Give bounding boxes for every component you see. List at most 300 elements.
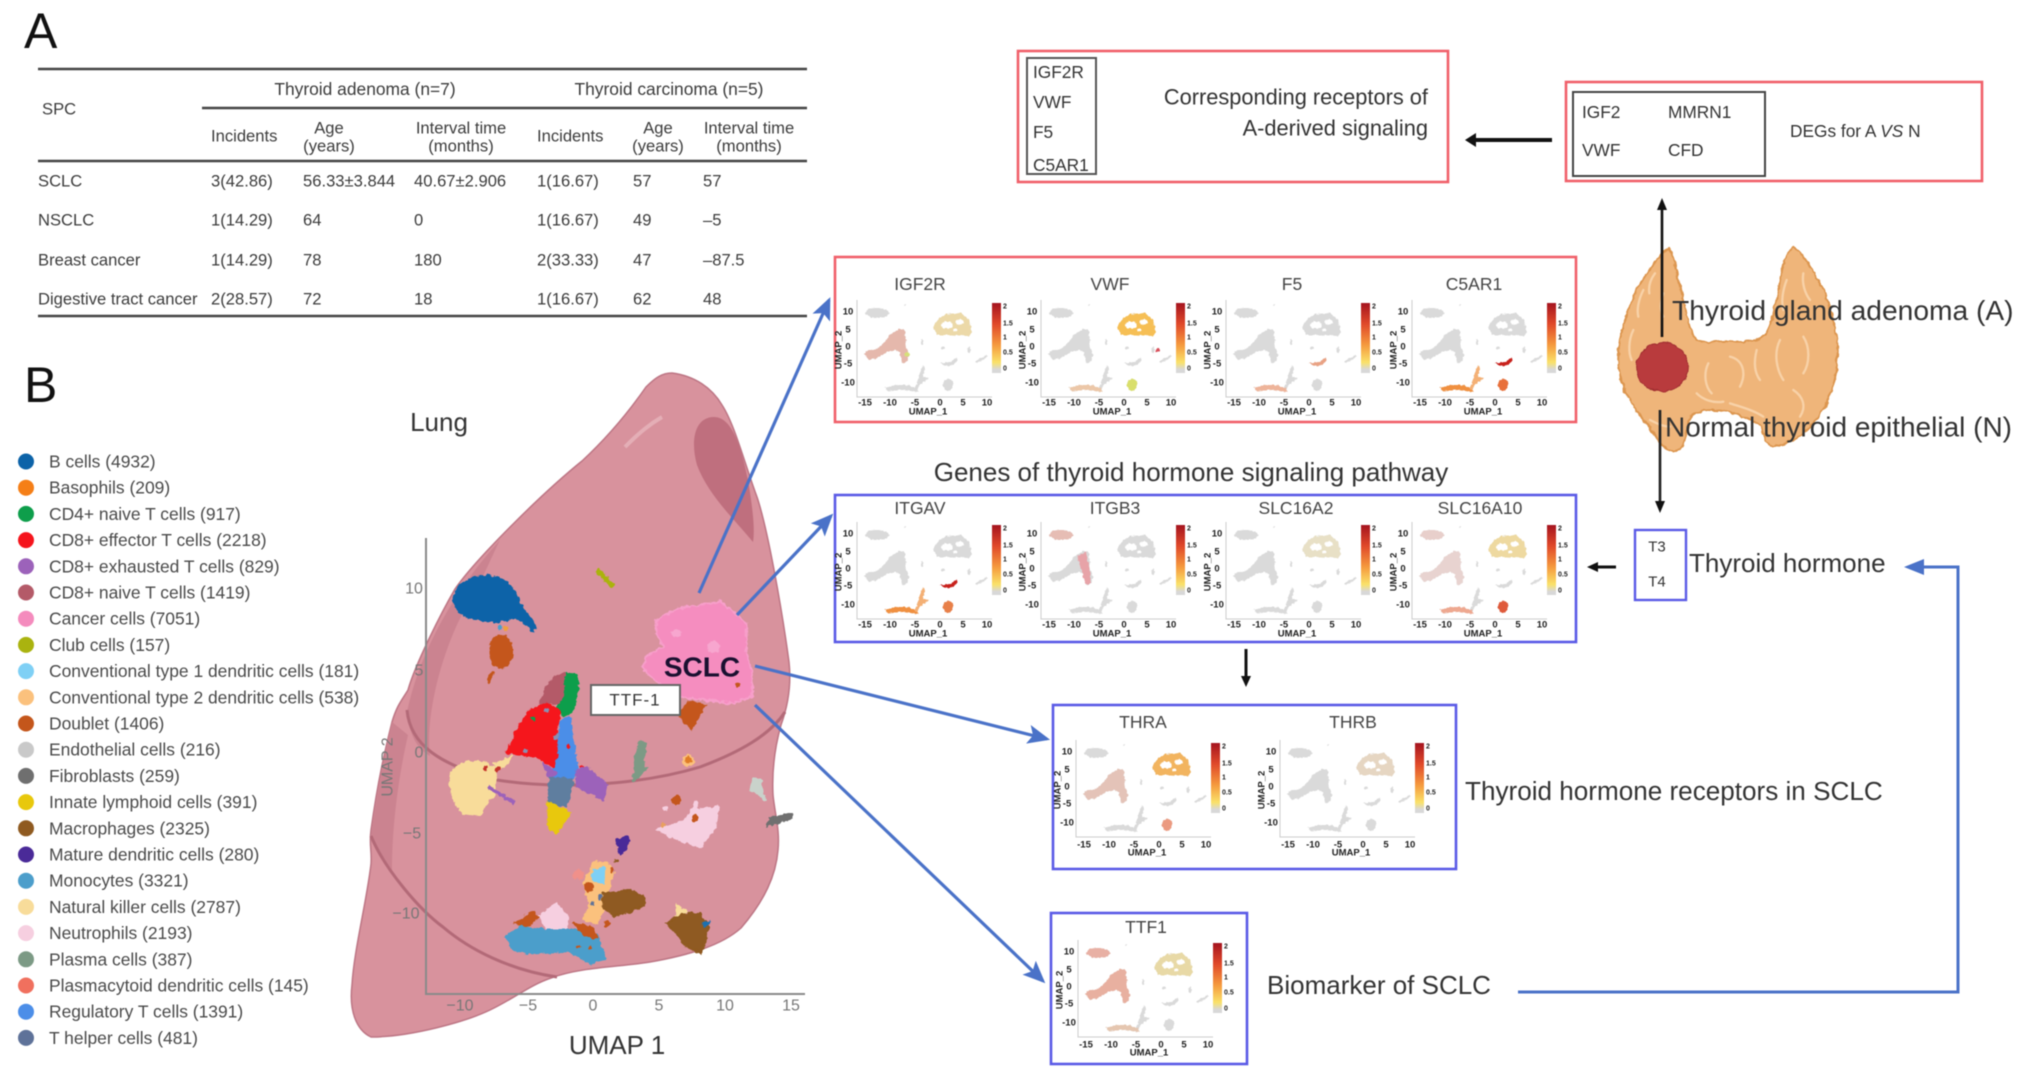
plot THRB: 0: [1426, 806, 1430, 812]
panel: corresponding receptors: [1018, 51, 1448, 182]
legend item Neutrophils: Neutrophils (2193): [49, 923, 192, 943]
plot SLC16A10: 0: [1558, 588, 1562, 594]
plot ITGAV: 1.5: [1003, 542, 1013, 550]
plot SLC16A2: 10: [1212, 528, 1222, 540]
plot F5: 5: [1214, 324, 1220, 336]
plot THRA: 10: [1201, 840, 1211, 850]
plot THRA: -10: [1060, 818, 1074, 828]
plot THRA: 0: [1156, 840, 1162, 850]
plot SLC16A10: 1: [1558, 556, 1562, 564]
UMAP axes: 15: [782, 998, 800, 1014]
plot F5: -10: [1210, 378, 1224, 388]
plot TTF1: 0: [1158, 1040, 1164, 1050]
panel: thyroid hormone pathway UMAPs: [834, 495, 1576, 642]
plot THRB: -5: [1334, 840, 1343, 850]
blue arrow to blue UMAP panel: [737, 516, 831, 615]
plot TTF1: -5: [1132, 1040, 1141, 1050]
plot IGF2R: UMAP_1: [909, 406, 948, 418]
legend item cDC2: Conventional type 2 dendritic cells (538): [49, 687, 359, 707]
row NSCLC: [38, 210, 721, 230]
plot THRA: 0: [1064, 782, 1070, 792]
plot SLC16A10: -10: [1438, 620, 1452, 630]
plot SLC16A2: -15: [1227, 620, 1242, 630]
plot ITGB3: UMAP_2: [1018, 553, 1028, 591]
plot THRB: UMAP_2: [1256, 771, 1268, 809]
legend item CD4 naive: CD4+ naive T cells (917): [49, 504, 241, 524]
plot F5: 0: [1372, 366, 1376, 372]
plot SLC16A2: -5: [1213, 580, 1222, 592]
plot SLC16A10: 5: [1400, 546, 1406, 558]
plot THRB: 10: [1266, 746, 1276, 758]
thyroid labels: [1665, 294, 2014, 442]
plot TTF1: -10: [1062, 1018, 1076, 1028]
plot THRA: 0.5: [1222, 790, 1232, 796]
plot IGF2R: -10: [883, 398, 897, 408]
caption: thyroid hormone: Thyroid hormone: [1689, 548, 1886, 578]
UMAP axes: 5: [655, 998, 664, 1014]
plot VWF: 1: [1187, 334, 1191, 342]
legend item CD8 naive: CD8+ naive T cells (1419): [49, 582, 250, 602]
plot C5AR1: 0: [1400, 342, 1406, 352]
plot C5AR1: [1388, 300, 1568, 418]
plot ITGB3: 1: [1187, 556, 1191, 564]
plot F5: -5: [1213, 358, 1222, 370]
gene list box: VWF: [1033, 92, 1071, 112]
DEG gene box: [1573, 92, 1765, 176]
plot VWF: 2: [1187, 304, 1191, 310]
cluster neutrophils lower: [538, 903, 568, 930]
plot VWF: UMAP_2: [1018, 331, 1028, 369]
row NSCLC: 0: [414, 210, 423, 230]
cluster doublet upper: [485, 625, 513, 685]
plot IGF2R: UMAP_2: [834, 331, 844, 369]
plot SLC16A2: 1.5: [1372, 542, 1382, 550]
plot SLC16A2: -10: [1210, 600, 1224, 610]
table header: (months): [428, 136, 494, 156]
plot ITGB3: -10: [1025, 600, 1039, 610]
legend item Monocytes: Monocytes (3321): [49, 871, 189, 891]
row Digestive tract cancer: 18: [414, 290, 432, 308]
cluster monocytes: [507, 927, 606, 963]
cluster macrophages centre: [603, 890, 645, 917]
cluster neutrophils: [657, 795, 718, 847]
icon: thyroid gland with tumour: [1618, 247, 1838, 452]
plot ITGB3: -5: [1028, 580, 1037, 592]
table header: Incidents: [537, 126, 603, 146]
plot ITGB3: 0: [1121, 620, 1127, 630]
plot IGF2R: -10: [841, 378, 855, 388]
plot C5AR1: 2: [1558, 304, 1562, 310]
plot F5: 0: [1306, 398, 1312, 408]
plot THRB: 5: [1383, 840, 1389, 850]
plot THRA: 5: [1179, 840, 1185, 850]
plot THRB: -10: [1306, 840, 1320, 850]
plot F5: UMAP_2: [1202, 331, 1214, 369]
plot IGF2R: 1: [1003, 334, 1007, 342]
panel: A-derived receptors UMAPs: [834, 257, 1576, 422]
plot SLC16A10: -10: [1396, 600, 1410, 610]
plot SLC16A10: 0: [1400, 564, 1406, 574]
blue arrow to red UMAP panel: [699, 300, 829, 593]
plot TTF1: UMAP_1: [1130, 1048, 1169, 1058]
plot ITGB3: 1.5: [1187, 542, 1197, 550]
plot SLC16A10: [1388, 522, 1568, 640]
UMAP axes: [380, 538, 805, 1014]
plot SLC16A10: 0.5: [1558, 572, 1568, 578]
plot THRB: [1256, 740, 1436, 858]
plot ITGB3: -15: [1042, 620, 1057, 630]
panel label A: A: [24, 3, 58, 59]
plot THRB: 2: [1426, 744, 1430, 750]
TTF-1 box: TTF-1: [609, 690, 661, 710]
plot THRB: UMAP_1: [1332, 848, 1371, 858]
plot IGF2R: [834, 300, 1013, 418]
plot ITGAV: 0.5: [1003, 572, 1013, 578]
plot SLC16A10: 10: [1398, 528, 1408, 540]
plot IGF2R: 0: [1003, 366, 1007, 372]
plot ITGAV: 2: [1003, 526, 1007, 532]
black arrow: DEGs to receptors: [1465, 133, 1552, 147]
plot F5: -5: [1280, 398, 1289, 408]
row SCLC: [38, 172, 721, 190]
row Digestive tract cancer: 1(16.67): [537, 290, 599, 308]
plot THRA: [1052, 740, 1232, 858]
title ITGB3: ITGB3: [1090, 498, 1140, 518]
plot C5AR1: 5: [1400, 324, 1406, 336]
box T3 T4: T4: [1648, 574, 1666, 590]
plot ITGAV: UMAP_1: [909, 628, 948, 640]
cluster Treg: [550, 717, 577, 780]
row Breast cancer: 180: [414, 250, 442, 270]
plot TTF1: 5: [1181, 1040, 1187, 1050]
UMAP axes: −10: [392, 906, 420, 922]
receptors caption: [1164, 84, 1429, 140]
plot F5: 1.5: [1372, 320, 1382, 328]
cluster dendritic strand: [572, 859, 618, 923]
plot THRA: 10: [1062, 746, 1072, 758]
plot VWF: 10: [1027, 306, 1037, 318]
plot C5AR1: 1.5: [1558, 320, 1568, 328]
plot F5: 10: [1351, 398, 1361, 408]
plot IGF2R: -5: [911, 398, 920, 408]
UMAP axes: −10: [446, 998, 474, 1014]
cluster CD4 naive: [557, 673, 578, 717]
plot IGF2R: 0.5: [1003, 350, 1013, 356]
plot THRA: -5: [1130, 840, 1139, 850]
plot IGF2R: 2: [1003, 304, 1007, 310]
row SCLC: 3(42.86): [211, 172, 273, 190]
row Digestive tract cancer: Digestive tract cancer: [38, 290, 198, 308]
receptors caption: A-derived signaling: [1243, 116, 1428, 140]
legend item Cancer cells: Cancer cells (7051): [49, 609, 200, 629]
row Digestive tract cancer: 72: [303, 290, 321, 308]
plot IGF2R: 0: [845, 342, 851, 352]
cluster macrophages right: [667, 905, 710, 953]
plot F5: 10: [1212, 306, 1222, 318]
plot ITGAV: -5: [844, 580, 853, 592]
row SCLC: 40.67±2.906: [414, 172, 506, 190]
plot SLC16A2: 0: [1372, 588, 1376, 594]
blue arrow to biomarker panel: [755, 705, 1043, 981]
plot ITGAV: 5: [845, 546, 851, 558]
row SCLC: 57: [633, 172, 651, 190]
table header: [42, 79, 794, 156]
title F5: F5: [1282, 274, 1302, 294]
gene list box: [1027, 58, 1096, 175]
row Breast cancer: 1(14.29): [211, 250, 273, 270]
plot THRA: 5: [1064, 764, 1070, 776]
legend item Innate lymphoid: Innate lymphoid cells (391): [49, 792, 257, 812]
plot SLC16A10: -5: [1399, 580, 1408, 592]
plot C5AR1: 0: [1558, 366, 1562, 372]
caption: biomarker of SCLC: Biomarker of SCLC: [1267, 970, 1491, 1000]
plot C5AR1: -5: [1466, 398, 1475, 408]
gene list box: C5AR1: [1033, 155, 1089, 175]
plot ITGB3: 2: [1187, 526, 1191, 532]
legend item Doublet: Doublet (1406): [49, 714, 164, 734]
plot F5: [1202, 300, 1382, 418]
plot SLC16A10: -5: [1466, 620, 1475, 630]
row Breast cancer: Breast cancer: [38, 250, 141, 270]
plot F5: -15: [1227, 398, 1242, 408]
plot ITGAV: 0: [845, 564, 851, 574]
plot ITGB3: 5: [1029, 546, 1035, 558]
DEG gene box: IGF2: [1582, 102, 1620, 122]
plot ITGB3: -5: [1095, 620, 1104, 630]
plot SLC16A2: [1202, 522, 1382, 640]
cluster T helper: [548, 777, 573, 807]
black arrow: thyroid down to hormone: [1655, 410, 1665, 513]
plot VWF: 5: [1029, 324, 1035, 336]
title VWF: VWF: [1091, 274, 1129, 294]
row Digestive tract cancer: [38, 290, 721, 308]
plot ITGB3: 0: [1029, 564, 1035, 574]
plot THRA: UMAP_2: [1052, 771, 1064, 809]
plot SLC16A10: 5: [1515, 620, 1521, 630]
plot ITGAV: 0: [1003, 588, 1007, 594]
plot TTF1: -15: [1079, 1040, 1094, 1050]
cluster B cells: [453, 576, 537, 631]
plot C5AR1: UMAP_2: [1388, 331, 1400, 369]
plot IGF2R: -15: [858, 398, 873, 408]
thyroid labels: Normal thyroid epithelial (N): [1665, 412, 2012, 442]
plot ITGB3: 0.5: [1187, 572, 1197, 578]
plot VWF: 10: [1166, 398, 1176, 408]
plot ITGB3: 5: [1144, 620, 1150, 630]
plot F5: 2: [1372, 304, 1376, 310]
lung left shaded edge: [371, 540, 500, 870]
heading: thyroid hormone pathway genes: Genes of thyroid hormone signaling pathway: [934, 457, 1448, 487]
plot F5: 5: [1329, 398, 1335, 408]
cluster innate lymphoid: [548, 802, 570, 833]
plot F5: 1: [1372, 334, 1376, 342]
plot C5AR1: 10: [1537, 398, 1547, 408]
plot F5: 0.5: [1372, 350, 1382, 356]
UMAP axes: −5: [519, 998, 537, 1014]
plot ITGAV: 0: [937, 620, 943, 630]
plot TTF1: 10: [1064, 946, 1074, 958]
legend item Macrophages: Macrophages (2325): [49, 818, 210, 838]
plot TTF1: 1: [1224, 974, 1228, 982]
panel: thyroid hormone receptors UMAPs: [1052, 705, 1456, 869]
UMAP axes: 10: [716, 998, 734, 1014]
plot C5AR1: 0.5: [1558, 350, 1568, 356]
plot ITGB3: 0: [1187, 588, 1191, 594]
UMAP axes: UMAP 2: [380, 737, 396, 797]
row Breast cancer: –87.5: [703, 250, 745, 270]
plot ITGB3: 10: [1027, 528, 1037, 540]
caption: thyroid hormone receptors: Thyroid hormone receptors in SCLC: [1465, 776, 1883, 806]
plot C5AR1: -10: [1438, 398, 1452, 408]
row SCLC: SCLC: [38, 172, 82, 190]
plot THRB: 0: [1268, 782, 1274, 792]
plot SLC16A10: 10: [1537, 620, 1547, 630]
table header: SPC: [42, 100, 76, 118]
cluster cancer cells: [643, 602, 753, 703]
blue arrow to receptors panel: [755, 666, 1047, 739]
table header: Interval time: [704, 118, 794, 138]
plot SLC16A2: UMAP_1: [1278, 628, 1317, 640]
plot THRB: 1: [1426, 774, 1430, 782]
cluster small orange spot: [682, 755, 694, 767]
plot TTF1: 1.5: [1224, 960, 1234, 968]
plot SLC16A2: 0.5: [1372, 572, 1382, 578]
plot THRA: -10: [1102, 840, 1116, 850]
legend item Endothelial: Endothelial cells (216): [49, 740, 221, 760]
plot IGF2R: -5: [844, 358, 853, 370]
plot TTF1: 2: [1224, 944, 1228, 950]
legend item Plasma: Plasma cells (387): [49, 949, 192, 969]
title SLC16A2: SLC16A2: [1259, 498, 1333, 518]
plot TTF1: -5: [1065, 998, 1074, 1010]
plot C5AR1: -10: [1396, 378, 1410, 388]
legend item Fibroblasts: Fibroblasts (259): [49, 766, 180, 786]
table header: Age: [643, 118, 673, 138]
row Breast cancer: 47: [633, 250, 651, 270]
plot ITGAV: 10: [843, 528, 853, 540]
plot SLC16A2: -5: [1280, 620, 1289, 630]
table header: Age: [314, 118, 344, 138]
UMAP axes: 0: [415, 744, 424, 762]
plot SLC16A10: 1.5: [1558, 542, 1568, 550]
plot ITGAV: 5: [960, 620, 966, 630]
legend item pDC: Plasmacytoid dendritic cells (145): [49, 976, 309, 996]
plot SLC16A2: -10: [1252, 620, 1266, 630]
cluster plasma: [633, 740, 648, 782]
table: SPC incidence: [38, 69, 807, 316]
lung title: Lung: [410, 407, 468, 437]
DEG gene box: VWF: [1582, 140, 1620, 160]
thyroid lobules: [1629, 273, 1810, 427]
plot THRA: 0: [1222, 806, 1226, 812]
cluster doublet under cancer: [680, 702, 705, 729]
title C5AR1: C5AR1: [1446, 274, 1502, 294]
DEG caption: DEGs for A VS N: [1790, 121, 1921, 141]
lung lobe fissures: [371, 710, 785, 977]
plot THRA: 1: [1222, 774, 1226, 782]
plot THRB: -15: [1281, 840, 1296, 850]
plot VWF: [1018, 300, 1197, 418]
table header: (months): [716, 136, 782, 156]
plot TTF1: 10: [1203, 1040, 1213, 1050]
plot C5AR1: 0: [1492, 398, 1498, 408]
plot TTF1: 0: [1224, 1006, 1228, 1012]
plot SLC16A2: 0: [1306, 620, 1312, 630]
UMAP axes: −5: [403, 826, 421, 842]
row NSCLC: 64: [303, 210, 321, 230]
plot VWF: -5: [1095, 398, 1104, 408]
row SCLC: 57: [703, 172, 721, 190]
plot ITGAV: -10: [883, 620, 897, 630]
row Digestive tract cancer: 48: [703, 290, 721, 308]
title IGF2R: IGF2R: [894, 274, 946, 294]
table header: Interval time: [416, 118, 506, 138]
plot ITGB3: UMAP_1: [1093, 628, 1132, 640]
plot THRB: 0.5: [1426, 790, 1436, 796]
cluster endothelial: [750, 778, 765, 800]
plot SLC16A2: 0: [1214, 564, 1220, 574]
plot F5: UMAP_1: [1278, 406, 1317, 418]
legend item Treg: Regulatory T cells (1391): [49, 1002, 243, 1022]
TTF-1 box: [591, 685, 680, 715]
plot ITGAV: [834, 522, 1013, 640]
plot THRA: 1.5: [1222, 760, 1232, 768]
plot SLC16A2: 5: [1214, 546, 1220, 558]
row Digestive tract cancer: 2(28.57): [211, 290, 273, 308]
row SCLC: 1(16.67): [537, 172, 599, 190]
plot VWF: -10: [1025, 378, 1039, 388]
plot F5: 0: [1214, 342, 1220, 352]
row NSCLC: 1(16.67): [537, 210, 599, 230]
plot THRA: -5: [1063, 798, 1072, 810]
cluster CD8 effector: [507, 703, 584, 769]
plot SLC16A2: UMAP_2: [1202, 553, 1214, 591]
table header: Incidents: [211, 126, 277, 146]
row Breast cancer: 78: [303, 250, 321, 270]
UMAP axes: 10: [405, 580, 423, 598]
cluster CD8 naive: [540, 673, 570, 703]
row NSCLC: 49: [633, 210, 651, 230]
panel: TTF1 biomarker UMAP: [1051, 913, 1247, 1064]
DEG gene box: MMRN1: [1668, 102, 1731, 122]
plot ITGAV: 10: [982, 620, 992, 630]
plot VWF: 0: [1029, 342, 1035, 352]
row NSCLC: NSCLC: [38, 210, 94, 230]
legend item NK: Natural killer cells (2787): [49, 897, 241, 917]
legend: cell types: [18, 452, 359, 1048]
plot ITGAV: -10: [841, 600, 855, 610]
plot THRB: -10: [1264, 818, 1278, 828]
plot ITGAV: UMAP_2: [834, 553, 844, 591]
title THRB: THRB: [1329, 712, 1377, 732]
legend item cDC1: Conventional type 1 dendritic cells (181): [49, 661, 359, 681]
plot VWF: UMAP_1: [1093, 406, 1132, 418]
plot VWF: -15: [1042, 398, 1057, 408]
legend item B cells: B cells (4932): [49, 452, 156, 472]
cluster fibroblasts: [767, 813, 793, 827]
plot C5AR1: -5: [1399, 358, 1408, 370]
cluster doublet lower: [515, 912, 538, 927]
plot THRB: 0: [1360, 840, 1366, 850]
plot ITGB3: -10: [1067, 620, 1081, 630]
plot THRA: -15: [1077, 840, 1092, 850]
receptors caption: Corresponding receptors of: [1164, 84, 1429, 110]
plot VWF: 0: [1121, 398, 1127, 408]
black arrow: pathway to receptors: [1241, 649, 1251, 687]
lung highlight: [625, 417, 662, 447]
plot VWF: 0.5: [1187, 350, 1197, 356]
thyroid labels: Thyroid gland adenoma (A): [1672, 294, 2014, 326]
